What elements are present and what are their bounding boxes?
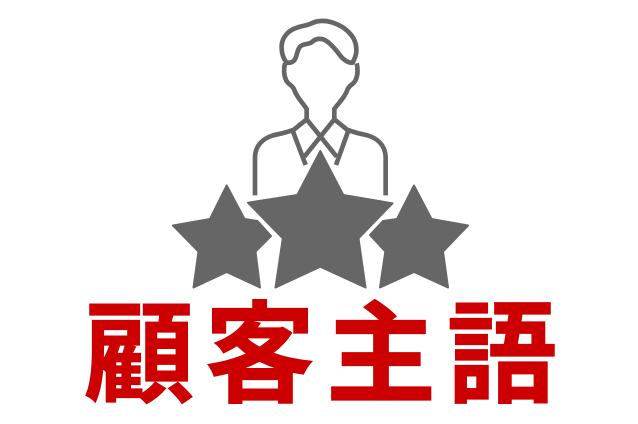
title: 主 [326,294,436,418]
title [84,294,557,418]
right star [370,186,468,288]
face and neck [284,63,358,119]
shoulders [255,130,386,195]
icon: three rating stars [173,151,468,288]
title: 客 [205,294,315,418]
hair outline [282,21,356,63]
left star [173,186,271,288]
title: 顧 [84,294,194,418]
title: 語 [447,294,557,418]
collar [293,119,348,165]
center star [248,151,392,288]
icon: customer person outline [255,21,386,195]
